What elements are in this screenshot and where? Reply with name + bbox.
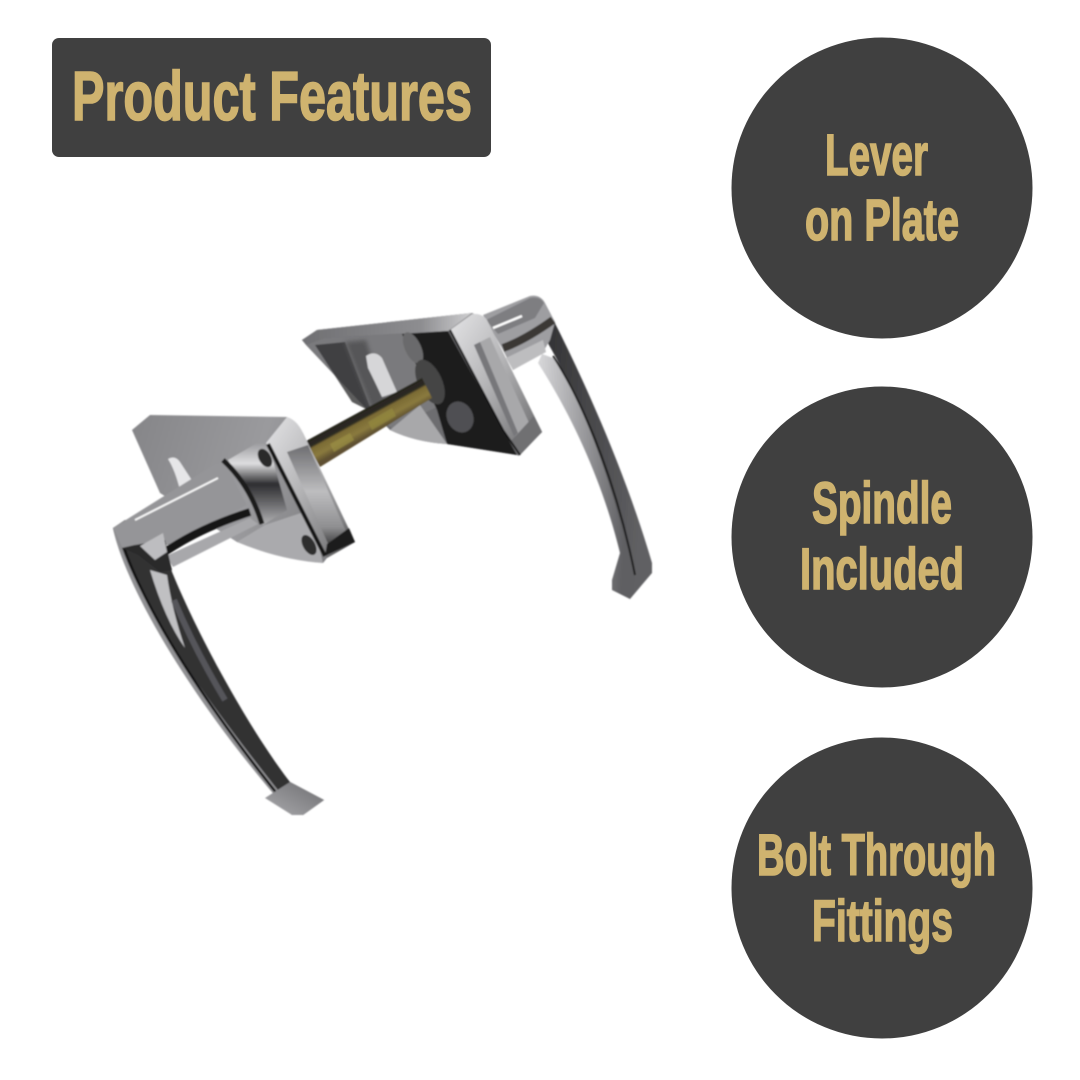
front lever barrel bbox=[113, 463, 258, 572]
rear backplate bbox=[302, 313, 542, 455]
feature circle: Spindle Included: Spindle bbox=[812, 471, 952, 536]
feature circle: Lever on Plate: on Plate bbox=[805, 188, 959, 253]
feature circle: Spindle Included: Included bbox=[800, 537, 964, 602]
feature circle: Bolt Through Fittings bbox=[732, 738, 1032, 1038]
front plate rim bbox=[266, 417, 355, 558]
feature circle: Spindle Included bbox=[732, 386, 1032, 688]
front backplate bbox=[132, 415, 355, 563]
front lever arm bbox=[113, 520, 324, 815]
rear lever barrel bbox=[483, 296, 555, 370]
rear lever arm bbox=[538, 300, 652, 599]
feature circle: Bolt Through Fittings: Fittings bbox=[812, 889, 953, 954]
feature circle: Lever on Plate: Lever bbox=[825, 123, 928, 188]
title badge: Product Features bbox=[52, 38, 491, 157]
feature circle: Lever on Plate bbox=[732, 38, 1032, 338]
spindle bbox=[306, 378, 432, 467]
front lever collar and fixing screw bbox=[223, 443, 287, 525]
rear plate rim bbox=[450, 314, 542, 456]
product photo: chrome lever door handles on plates with spindle bbox=[113, 296, 652, 815]
title badge: Product Features: Product Features bbox=[72, 57, 472, 135]
